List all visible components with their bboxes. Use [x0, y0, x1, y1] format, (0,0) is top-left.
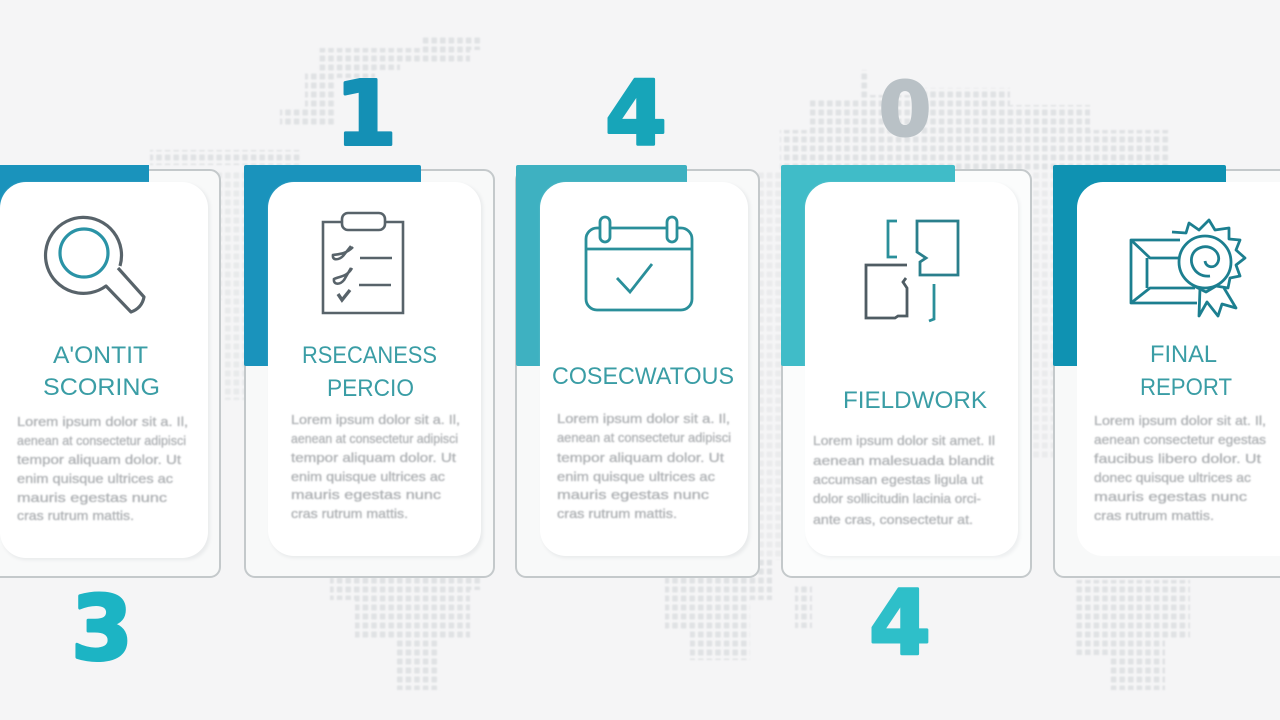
card 1 body text: cras rutrum mattis.	[17, 508, 134, 523]
card 2 panel shadow	[270, 184, 483, 558]
card 2 body text: enim quisque ultrices ac	[291, 469, 446, 484]
card 5 body text: Lorem ipsum dolor sit at. Il,	[1094, 413, 1266, 428]
card 3 icon: calendar check	[586, 217, 692, 310]
card 3 body text: enim quisque ultrices ac	[557, 469, 716, 484]
card 4 body text: aenean malesuada blandit	[813, 453, 994, 468]
card 4 body text: dolor sollicitudin lacinia orci-	[813, 491, 981, 506]
card 3 body text: mauris egestas nunc	[557, 487, 710, 502]
card 4 body text	[813, 433, 995, 527]
card 3 panel shadow	[542, 184, 750, 558]
card 2 outline	[245, 170, 494, 577]
card 1 white panel	[0, 182, 208, 558]
card 3 heading: COSECWATOUS	[552, 363, 734, 390]
card 2 body text: cras rutrum mattis.	[291, 506, 408, 521]
card 2 icon: clipboard checklist	[323, 213, 403, 313]
card 1 body text: mauris egestas nunc	[17, 490, 168, 505]
card 1 heading	[43, 342, 160, 401]
card 2 body text	[291, 412, 460, 521]
number 4 top: 4	[605, 62, 667, 166]
card 5 icon: report with seal	[1131, 220, 1245, 316]
card 3 outline	[516, 170, 759, 577]
card 1 body text: enim quisque ultrices ac	[17, 471, 174, 486]
card 3 body text: tempor aliquam dolor. Ut	[557, 450, 724, 465]
card 4 panel shadow	[807, 184, 1020, 558]
card 4	[781, 165, 1031, 577]
card 2	[244, 165, 494, 577]
card 5 accent block	[1053, 165, 1226, 366]
card 2 body text: Lorem ipsum dolor sit a. Il,	[291, 412, 460, 427]
card 5 heading	[1140, 341, 1232, 401]
card 4 body text: Lorem ipsum dolor sit amet. Il	[813, 433, 995, 448]
card 3 body text: aenean at consectetur adipisci	[557, 430, 731, 445]
card 2 body text: tempor aliquam dolor. Ut	[291, 450, 456, 465]
card 4 white panel	[805, 182, 1018, 556]
card 1	[0, 165, 220, 577]
card 1 panel shadow	[2, 184, 210, 560]
card 4 icon: linked documents	[866, 221, 958, 321]
number 1: 1	[335, 62, 397, 166]
card 2 body text: mauris egestas nunc	[291, 487, 442, 502]
card 5 outline	[1054, 170, 1280, 577]
card 5 body text: faucibus libero dolor. Ut	[1094, 451, 1261, 466]
card 4 body text: accumsan egestas ligula ut	[813, 472, 983, 487]
number 4 bottom: 4	[869, 571, 931, 675]
card 2 heading: PERCIO	[327, 375, 414, 402]
card 1 body text: Lorem ipsum dolor sit a. Il,	[17, 414, 188, 429]
card 1 body text: tempor aliquam dolor. Ut	[17, 452, 181, 467]
card 5 body text: aenean consectetur egestas	[1094, 432, 1267, 447]
card 1 accent block	[0, 165, 149, 366]
card 5 body text	[1094, 413, 1267, 523]
card 2 heading	[302, 342, 437, 402]
card 5	[1053, 165, 1280, 577]
card 3 accent block	[516, 165, 687, 366]
number gray: 0	[879, 67, 931, 153]
card 3 body text: cras rutrum mattis.	[557, 506, 677, 521]
card 4 body text: ante cras, consectetur at.	[813, 512, 973, 527]
card 5 body text: mauris egestas nunc	[1094, 489, 1248, 504]
card 3 body text	[557, 411, 731, 521]
card 1 body text	[17, 414, 188, 523]
card 4 accent block	[781, 165, 955, 366]
card 2 accent block	[244, 165, 421, 366]
card 4 heading: FIELDWORK	[843, 387, 987, 414]
card 5 white panel	[1077, 182, 1280, 556]
card 5 body text: cras rutrum mattis.	[1094, 508, 1214, 523]
number 3 bottom: 3	[71, 576, 133, 680]
card 2 heading: RSECANESS	[302, 342, 437, 369]
background: dotted world map	[150, 35, 1190, 690]
card 1 heading: SCORING	[43, 374, 160, 401]
card 3 body text: Lorem ipsum dolor sit a. Il,	[557, 411, 730, 426]
card 5 heading: FINAL	[1150, 341, 1217, 368]
card 1 heading: A'ONTIT	[53, 342, 148, 369]
card 2 white panel	[268, 182, 481, 556]
card 2 body text: aenean at consectetur adipisci	[291, 431, 458, 446]
card 1 body text: aenean at consectetur adipisci	[17, 433, 186, 448]
card 1 icon: magnifier	[46, 217, 144, 312]
card 5 body text: donec quisque ultrices ac	[1094, 470, 1252, 485]
card 3 white panel	[540, 182, 748, 556]
card 1 outline	[0, 170, 220, 577]
card 4 outline	[782, 170, 1031, 577]
card 5 heading: REPORT	[1140, 374, 1232, 401]
card 3	[516, 165, 759, 577]
